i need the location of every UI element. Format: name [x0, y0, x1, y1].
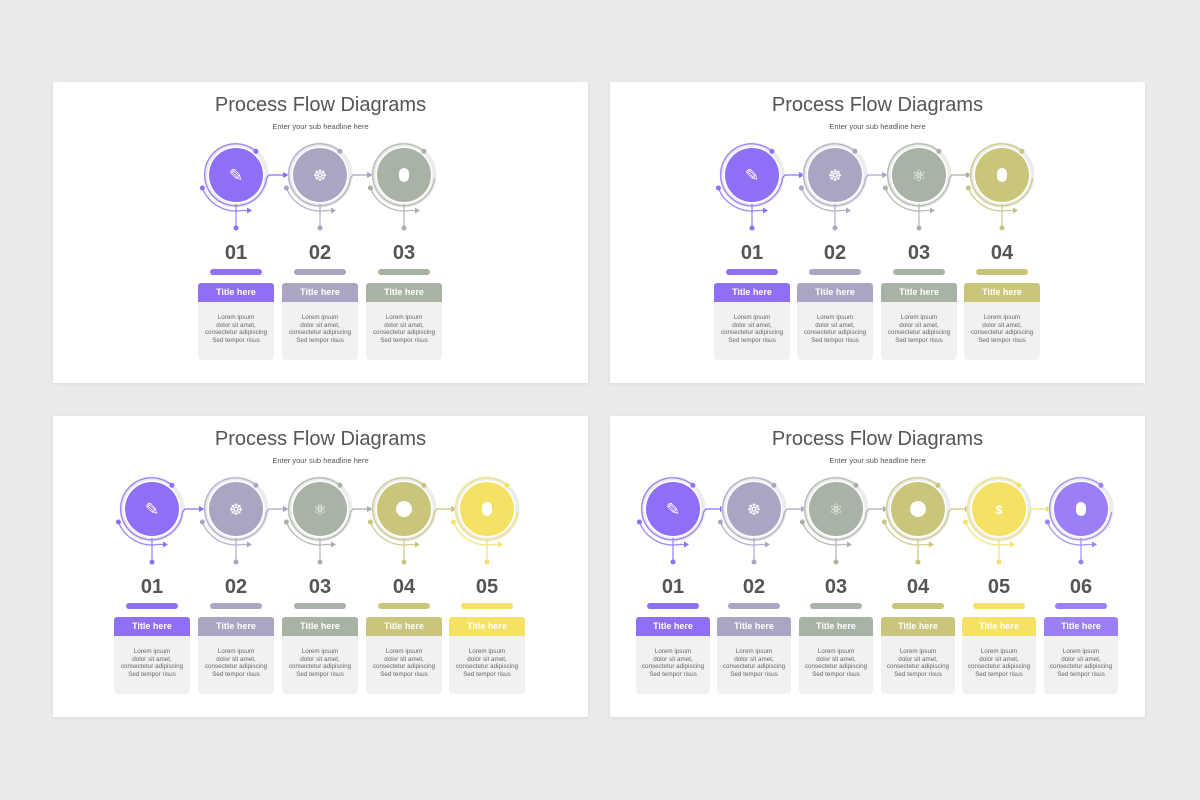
step 05: $: [996, 503, 1003, 517]
step 03: 03: [393, 242, 415, 264]
step 06: Sed tempor risus: [1057, 671, 1105, 678]
step 06: dolor sit amet,: [1061, 656, 1101, 663]
subtitle: Enter your sub headline here: [829, 122, 926, 131]
step 01: [714, 142, 803, 360]
step 01: ✎: [145, 500, 159, 519]
step 02: Sed tempor risus: [730, 671, 778, 678]
step 01: 01: [741, 242, 763, 264]
step 04: 04: [907, 576, 929, 598]
step 03: Lorem ipsum: [386, 314, 422, 321]
step 01: [114, 476, 204, 694]
step 03: 03: [825, 576, 847, 598]
step 01: dolor sit amet,: [132, 656, 172, 663]
step 04: Lorem ipsum: [386, 648, 422, 655]
step 03: [366, 142, 442, 360]
step 02: ☸: [229, 502, 243, 519]
step 03: [282, 476, 372, 694]
step 02: 02: [824, 242, 846, 264]
step 03: dolor sit amet,: [384, 322, 424, 329]
step 04: Lorem ipsum: [900, 648, 936, 655]
step 05: Title here: [467, 621, 507, 631]
step 03: Title here: [384, 287, 424, 297]
step 01: consectetur adipiscing: [642, 663, 704, 670]
step 02: 02: [309, 242, 331, 264]
step 02: dolor sit amet,: [734, 656, 774, 663]
step 02: 02: [225, 576, 247, 598]
step 01: consectetur adipiscing: [205, 329, 267, 336]
step 03: 03: [309, 576, 331, 598]
step 04: consectetur adipiscing: [887, 663, 949, 670]
step 02: Sed tempor risus: [811, 337, 859, 344]
step 04: 04: [393, 576, 415, 598]
step 04: consectetur adipiscing: [373, 663, 435, 670]
step 05: consectetur adipiscing: [456, 663, 518, 670]
step 02: [797, 142, 886, 360]
step 01: Sed tempor risus: [212, 337, 260, 344]
step 01: Title here: [732, 287, 772, 297]
step 04: [366, 476, 455, 694]
step 06: Lorem ipsum: [1063, 648, 1099, 655]
step 04: dolor sit amet,: [898, 656, 938, 663]
step 01: Title here: [216, 287, 256, 297]
step 02: dolor sit amet,: [815, 322, 855, 329]
step 02: dolor sit amet,: [300, 322, 340, 329]
step 03: ⚛: [912, 168, 926, 185]
step 02: 02: [743, 576, 765, 598]
step 03: Title here: [816, 621, 856, 631]
step 02: Lorem ipsum: [302, 314, 338, 321]
step 02: ☸: [313, 168, 327, 185]
step 04: Sed tempor risus: [380, 671, 428, 678]
step 05: [962, 476, 1049, 694]
step 01: Sed tempor risus: [649, 671, 697, 678]
step 05: consectetur adipiscing: [968, 663, 1030, 670]
step 02: Title here: [216, 621, 256, 631]
step 05: Sed tempor risus: [975, 671, 1023, 678]
step 04: [881, 476, 967, 694]
title: Process Flow Diagrams: [772, 94, 983, 116]
step 03: Sed tempor risus: [812, 671, 860, 678]
step 04: Sed tempor risus: [978, 337, 1026, 344]
step 06: consectetur adipiscing: [1050, 663, 1112, 670]
step 03: Lorem ipsum: [302, 648, 338, 655]
step 02: [198, 476, 288, 694]
step 01: 01: [141, 576, 163, 598]
step 05: dolor sit amet,: [467, 656, 507, 663]
subtitle: Enter your sub headline here: [272, 122, 369, 131]
step 02: Title here: [734, 621, 774, 631]
step 03: dolor sit amet,: [899, 322, 939, 329]
step 04: Lorem ipsum: [984, 314, 1020, 321]
step 01: Sed tempor risus: [728, 337, 776, 344]
subtitle: Enter your sub headline here: [272, 456, 369, 465]
step 03: Title here: [300, 621, 340, 631]
step 06: [1044, 476, 1118, 694]
step 03: Lorem ipsum: [901, 314, 937, 321]
step 02: ☸: [747, 502, 761, 519]
step 01: Sed tempor risus: [128, 671, 176, 678]
step 03: Title here: [899, 287, 939, 297]
step 03: Sed tempor risus: [296, 671, 344, 678]
step 03: ⚛: [313, 502, 327, 519]
step 03: [799, 476, 886, 694]
step 02: Lorem ipsum: [817, 314, 853, 321]
step 03: Sed tempor risus: [380, 337, 428, 344]
step 05: dolor sit amet,: [979, 656, 1019, 663]
step 03: consectetur adipiscing: [888, 329, 950, 336]
step 01: 01: [225, 242, 247, 264]
step 05: Sed tempor risus: [463, 671, 511, 678]
panel: 6 steps: [610, 416, 1145, 717]
step 01: [636, 476, 722, 694]
step 04: Title here: [982, 287, 1022, 297]
title: Process Flow Diagrams: [215, 94, 426, 116]
step 04: dolor sit amet,: [982, 322, 1022, 329]
step 02: [282, 142, 372, 360]
step 05: [449, 476, 525, 694]
step 01: ✎: [666, 500, 680, 519]
step 02: Title here: [300, 287, 340, 297]
panel: 4 steps: [610, 82, 1145, 383]
step 04: [964, 142, 1040, 360]
step 02: Lorem ipsum: [218, 648, 254, 655]
title: Process Flow Diagrams: [772, 428, 983, 450]
step 02: Sed tempor risus: [212, 671, 260, 678]
step 01: dolor sit amet,: [653, 656, 693, 663]
step 06: 06: [1070, 576, 1092, 598]
step 03: [881, 142, 970, 360]
step 02: consectetur adipiscing: [723, 663, 785, 670]
step 02: Lorem ipsum: [736, 648, 772, 655]
step 04: Title here: [384, 621, 424, 631]
step 03: 03: [908, 242, 930, 264]
step 01: Lorem ipsum: [218, 314, 254, 321]
panel: 3 steps: [53, 82, 588, 383]
step 01: consectetur adipiscing: [121, 663, 183, 670]
step 03: dolor sit amet,: [816, 656, 856, 663]
step 03: ⚛: [829, 502, 843, 519]
step 03: consectetur adipiscing: [373, 329, 435, 336]
panel: 5 steps: [53, 416, 588, 717]
step 03: consectetur adipiscing: [289, 663, 351, 670]
step 05: 05: [476, 576, 498, 598]
step 04: consectetur adipiscing: [971, 329, 1033, 336]
step 04: dolor sit amet,: [384, 656, 424, 663]
step 02: dolor sit amet,: [216, 656, 256, 663]
step 04: Sed tempor risus: [894, 671, 942, 678]
step 01: Title here: [653, 621, 693, 631]
step 01: ✎: [745, 166, 759, 185]
step 04: 04: [991, 242, 1013, 264]
step 01: Lorem ipsum: [734, 314, 770, 321]
step 05: Title here: [979, 621, 1019, 631]
step 02: Title here: [815, 287, 855, 297]
subtitle: Enter your sub headline here: [829, 456, 926, 465]
step 03: dolor sit amet,: [300, 656, 340, 663]
step 01: Title here: [132, 621, 172, 631]
step 02: consectetur adipiscing: [205, 663, 267, 670]
step 02: Sed tempor risus: [296, 337, 344, 344]
step 02: consectetur adipiscing: [804, 329, 866, 336]
step 01: consectetur adipiscing: [721, 329, 783, 336]
step 01: 01: [662, 576, 684, 598]
step 05: Lorem ipsum: [469, 648, 505, 655]
step 02: ☸: [828, 168, 842, 185]
step 05: 05: [988, 576, 1010, 598]
step 06: Title here: [1061, 621, 1101, 631]
step 01: dolor sit amet,: [732, 322, 772, 329]
step 02: consectetur adipiscing: [289, 329, 351, 336]
step 03: consectetur adipiscing: [805, 663, 867, 670]
step 01: Lorem ipsum: [655, 648, 691, 655]
step 01: [198, 142, 288, 360]
step 01: Lorem ipsum: [134, 648, 170, 655]
step 04: Title here: [898, 621, 938, 631]
step 03: Lorem ipsum: [818, 648, 854, 655]
step 03: Sed tempor risus: [895, 337, 943, 344]
step 05: Lorem ipsum: [981, 648, 1017, 655]
step 01: ✎: [229, 166, 243, 185]
step 02: [717, 476, 804, 694]
step 01: dolor sit amet,: [216, 322, 256, 329]
title: Process Flow Diagrams: [215, 428, 426, 450]
